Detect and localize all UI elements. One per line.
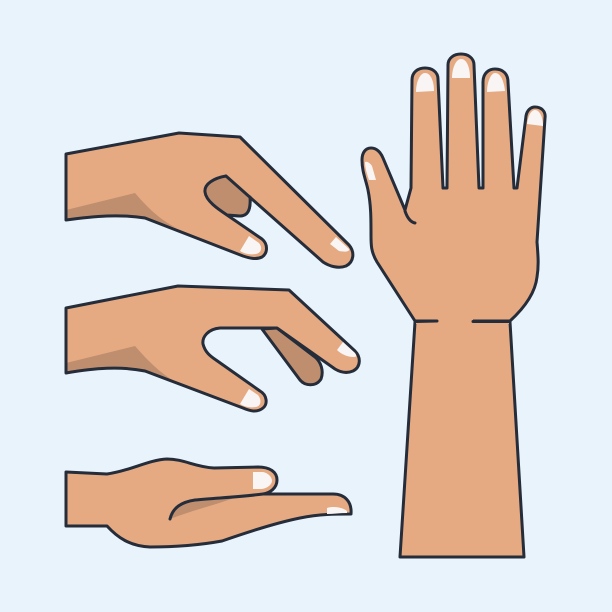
fingernail: thumb <box>365 162 376 180</box>
wrist gap cover <box>416 318 509 324</box>
palm crease shadow <box>170 497 237 519</box>
hand: open palm side view (bottom left) <box>66 459 351 547</box>
forearm <box>400 322 524 557</box>
palm and fingers <box>362 54 545 321</box>
fingernail: middle <box>452 59 470 78</box>
fingernail: index <box>337 342 356 357</box>
hand body <box>66 133 353 267</box>
wrist shadow <box>66 346 177 383</box>
hand: raised hand and forearm (right) <box>362 54 545 557</box>
fingernail: index <box>416 73 434 92</box>
wrist crease lines <box>415 320 510 323</box>
thumb crease <box>405 211 415 223</box>
fingernail: thumb <box>253 472 272 489</box>
fingernail: thumb <box>240 389 260 407</box>
hand body <box>66 459 351 547</box>
fingernail: thumb <box>240 236 261 254</box>
outline <box>66 286 359 411</box>
hand: pointing with folded finger (top left) <box>66 133 353 267</box>
fingernail: index <box>330 237 349 252</box>
outline <box>66 459 351 547</box>
wrist gap cover top <box>437 318 473 324</box>
fingernail: ring <box>487 73 505 92</box>
outline <box>66 133 353 267</box>
bent finger <box>262 328 322 385</box>
folded finger <box>205 176 250 216</box>
hand body <box>66 286 359 411</box>
hand: reaching with bent fingers (middle left) <box>66 286 359 411</box>
wrist shadow <box>66 193 177 228</box>
folded finger repaint <box>205 176 250 216</box>
fingernail: index <box>327 507 347 514</box>
fingernail: little <box>527 110 543 126</box>
